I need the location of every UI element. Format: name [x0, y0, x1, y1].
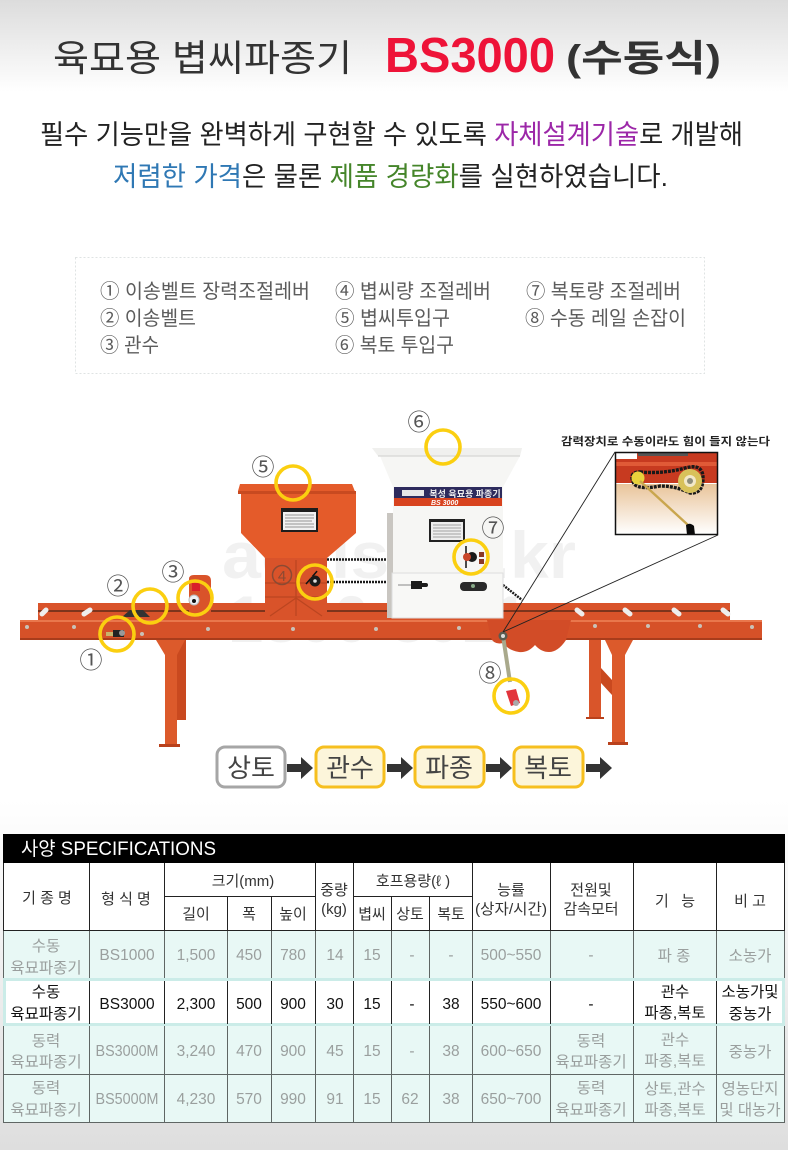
machine illustration: [20, 409, 770, 747]
table header: (상자/시간): [475, 901, 547, 918]
row: BS5000M: 4,230: [177, 1091, 216, 1108]
table header: 호프용량(ℓ ): [376, 873, 450, 890]
row: BS5000M: 영농단지: [721, 1080, 779, 1098]
row: BS5000M: [3, 1074, 785, 1122]
table header: 복토: [437, 906, 465, 923]
row: BS1000: 500~550: [481, 947, 542, 964]
row: BS5000M: 육묘파종기: [555, 1101, 627, 1119]
table header: 상토: [396, 906, 424, 923]
row: BS3000M: 파종,복토: [644, 1052, 706, 1070]
row: BS3000 highlighted: 550~600: [481, 996, 542, 1013]
row: BS3000 highlighted: -: [588, 996, 594, 1013]
row: BS3000M: 600~650: [481, 1043, 542, 1060]
table header: 비 고: [734, 893, 766, 910]
table header: 기 종 명: [22, 890, 72, 907]
table header: 볍씨: [358, 906, 386, 923]
panel: parts legend: [76, 258, 704, 374]
step: 파종: 파종: [425, 753, 473, 783]
row: BS5000M: 990: [280, 1091, 306, 1108]
row: BS5000M: 38: [442, 1091, 460, 1108]
rollers: [42, 610, 728, 614]
tension belt detail: [122, 610, 150, 617]
table header: (kg): [321, 901, 347, 918]
callout numbers: [80, 409, 504, 686]
row: BS3000 highlighted: 500: [236, 996, 262, 1013]
row: BS5000M: 동력: [577, 1079, 605, 1097]
row: BS3000 highlighted: 900: [280, 996, 306, 1013]
arrow: [486, 757, 512, 779]
step: 복토: 복토: [524, 753, 572, 783]
row: BS3000M: 470: [236, 1043, 262, 1060]
table header: 형 식 명: [101, 891, 151, 908]
row: BS3000M: 45: [326, 1043, 344, 1060]
title: (수동식): [566, 38, 721, 79]
row: BS3000 highlighted: 15: [363, 996, 381, 1013]
table title bar: 사양 SPECIFICATIONS: [21, 838, 216, 860]
panel: parts legend: ⑤ 볍씨투입구: [335, 307, 450, 330]
row: BS3000M: 동력: [32, 1032, 60, 1050]
panel: parts legend: ④ 볍씨량 조절레버: [335, 280, 491, 303]
row: BS5000M: 15: [363, 1091, 381, 1108]
row: BS5000M: 650~700: [481, 1091, 542, 1108]
row: BS3000 highlighted: 30: [326, 996, 344, 1013]
row: BS3000 highlighted: 중농가: [729, 1005, 771, 1023]
table header: 전원및: [570, 882, 612, 899]
specifications table: [3, 834, 785, 1122]
row: BS3000 highlighted: 2,300: [177, 996, 216, 1013]
inset caption: 감력장치로 수동이라도 힘이 들지 않는다: [561, 434, 770, 448]
panel: parts legend: ⑦ 복토량 조절레버: [526, 280, 681, 303]
table header: 길이: [182, 906, 210, 923]
row: BS3000 highlighted: 관수: [661, 983, 689, 1001]
row: BS3000M: 관수: [661, 1031, 689, 1049]
panel: parts legend: ① 이송벨트 장력조절레버: [100, 280, 310, 303]
drive guard: [487, 620, 571, 652]
row: BS1000: BS1000: [99, 947, 155, 964]
callout numbers: ⑤: [252, 454, 274, 480]
row: BS1000: -: [409, 947, 415, 964]
watermark: agris.co.kr: [222, 518, 576, 592]
row: BS5000M: 91: [326, 1091, 344, 1108]
soil machine: 복성 육묘용 파종기: [429, 488, 501, 499]
row: BS3000 highlighted: BS3000: [99, 996, 155, 1013]
row: BS5000M: 육묘파종기: [10, 1101, 82, 1119]
row: BS3000M: 15: [363, 1043, 381, 1060]
callout numbers: ①: [80, 647, 102, 673]
inset: reduction gear: [615, 452, 718, 535]
seed hopper: 4: [278, 568, 286, 585]
row: BS3000 highlighted: 소농가및: [721, 983, 779, 1001]
callout numbers: ⑧: [478, 660, 502, 686]
arrow: [287, 757, 313, 779]
right legs: [586, 640, 633, 745]
arrow: [387, 757, 413, 779]
panel: parts legend: ⑧ 수동 레일 손잡이: [525, 307, 686, 330]
row: BS1000: -: [448, 947, 454, 964]
intro text line 1: 필수 기능만을 완벽하게 구현할 수 있도록 자체설계기술로 개발해: [40, 120, 743, 150]
title: 육묘용 볍씨파종기: [53, 38, 352, 79]
inset leader lines: [503, 452, 718, 632]
title: [53, 29, 721, 83]
row: BS1000: 780: [280, 947, 306, 964]
hand crank: [498, 632, 520, 706]
row: BS3000 highlighted: 파종,복토: [644, 1004, 706, 1022]
title: BS3000: [385, 29, 555, 83]
drive belts: [327, 560, 522, 600]
step: 복토: [514, 747, 583, 787]
callout numbers: ③: [162, 559, 184, 585]
row: BS3000M: -: [409, 1043, 415, 1060]
table header: 기 능: [655, 893, 695, 910]
row: BS1000: 소농가: [729, 947, 771, 965]
row: BS1000: 수동: [32, 937, 60, 955]
process flow: [217, 747, 612, 787]
table header: 높이: [279, 906, 307, 923]
watermark: 1800-3011: [228, 582, 528, 656]
intro text line 2: 저렴한 가격은 물론 제품 경량화를 실현하였습니다.: [113, 162, 668, 192]
tension lever: [106, 630, 125, 637]
row: BS1000: 육묘파종기: [10, 959, 82, 977]
step: 상토: [217, 747, 285, 787]
row: BS1000: 1,500: [177, 947, 216, 964]
step: 관수: 관수: [326, 753, 374, 783]
row: BS3000 highlighted: 38: [442, 996, 460, 1013]
row: BS1000: 파 종: [658, 947, 690, 965]
row: BS3000M: 육묘파종기: [555, 1053, 627, 1071]
left legs: [156, 640, 186, 747]
step: 파종: [415, 747, 484, 787]
table header: 폭: [242, 906, 256, 923]
row: BS3000M: BS3000M: [96, 1043, 158, 1060]
panel: parts legend: ⑥ 복토 투입구: [335, 334, 454, 357]
row: BS1000: [3, 931, 785, 978]
row: BS3000M: 38: [442, 1043, 460, 1060]
step: 상토: 상토: [227, 753, 275, 783]
row: BS3000 highlighted: [4, 980, 784, 1024]
row: BS3000M: 중농가: [729, 1043, 771, 1061]
table header: 능률: [497, 882, 525, 899]
row: BS1000: 15: [363, 947, 381, 964]
back rail: [38, 603, 730, 621]
table header: 감속모터: [563, 901, 619, 918]
panel: parts legend: ② 이송벨트: [100, 307, 196, 330]
callout numbers: ⑦: [482, 515, 504, 541]
panel: parts legend: ③ 관수: [100, 334, 159, 357]
row: BS5000M: 파종,복토: [644, 1101, 706, 1119]
front rail: [20, 620, 762, 640]
row: BS3000 highlighted: -: [409, 996, 415, 1013]
row: BS1000: 450: [236, 947, 262, 964]
row: BS3000M: [3, 1026, 785, 1122]
row: BS5000M: 570: [236, 1091, 262, 1108]
row: BS3000 highlighted: 수동: [32, 983, 60, 1001]
soil machine: [372, 448, 522, 618]
table header: 크기(mm): [212, 873, 274, 890]
row: BS5000M: 동력: [32, 1079, 60, 1097]
watermark: [222, 518, 576, 656]
step: 관수: [316, 747, 384, 787]
row: BS3000M: 3,240: [177, 1043, 216, 1060]
row: BS3000 highlighted: 육묘파종기: [10, 1005, 82, 1023]
row: BS3000M: 육묘파종기: [10, 1053, 82, 1071]
soil machine: BS 3000: [431, 500, 458, 507]
seed hopper: [238, 484, 356, 618]
table title bar: [3, 834, 785, 863]
table header: 중량: [320, 882, 348, 899]
row: BS5000M: 및 대농가: [719, 1101, 781, 1119]
row: BS5000M: 상토,관수: [644, 1080, 706, 1098]
row: BS3000M: 동력: [577, 1032, 605, 1050]
row: BS1000: -: [588, 947, 594, 964]
callout numbers: ②: [106, 573, 130, 599]
watering bracket: [189, 575, 211, 618]
callout numbers: ⑥: [408, 409, 430, 435]
table header: [3, 863, 785, 930]
row: BS5000M: BS5000M: [96, 1091, 158, 1108]
row: BS1000: 14: [326, 947, 344, 964]
callout circles: [100, 430, 528, 713]
row: BS5000M: 62: [401, 1091, 419, 1108]
row: BS3000M: 900: [280, 1043, 306, 1060]
arrow: [586, 757, 612, 779]
